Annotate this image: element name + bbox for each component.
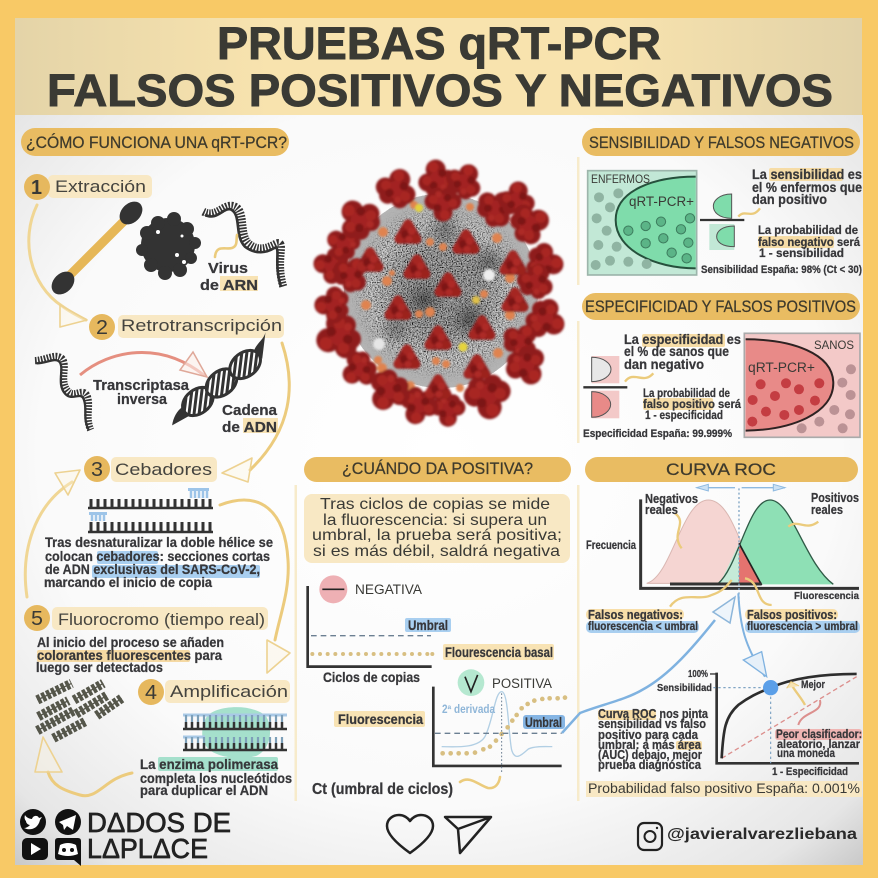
diagram: primers (88, 488, 213, 532)
chart: distributions (641, 484, 859, 607)
callout: virus de ARN: de ARN (200, 277, 258, 294)
heading: sensibilidad: SENSIBILIDAD Y FALSOS NEGATIVOS (589, 134, 854, 152)
icon: virus silhouette (136, 212, 201, 280)
heading: cuando da positiva: ¿CUÁNDO DA POSITIVA? (342, 459, 533, 478)
icon: heart (387, 815, 433, 853)
labels: positiva chart (312, 676, 565, 798)
step 4 heading: 4 (145, 682, 157, 704)
title (47, 18, 833, 116)
labels: negativa chart: Ciclos de copias (323, 669, 420, 685)
labels: distributions: Frecuencia (586, 540, 636, 552)
arrow: step 3 to 4 (220, 500, 290, 673)
step 2 heading (89, 314, 284, 340)
text: sensibilidad definition: 1 - sensibilidad (759, 246, 844, 260)
labels: distributions: Fluorescencia (794, 590, 859, 602)
chart: positiva (433, 669, 567, 774)
step 5 heading: Fluorocromo (tiempo real) (58, 610, 265, 629)
step 1 heading: 1 (31, 177, 42, 199)
text box: explicacion: si es más débil, saldrá negativa (313, 543, 560, 560)
arrow: step 1 to 2 (29, 205, 87, 327)
text box: explicacion: la fluorescencia: si supera un (323, 512, 547, 529)
brand name (87, 807, 231, 864)
text: sensibilidad definition: dan positivo (752, 191, 827, 207)
labels: positiva chart: Fluorescencia (338, 711, 423, 727)
callout: peor clasificador: una moneda (777, 746, 835, 760)
text: polimerasa: para duplicar el ADN (140, 782, 268, 798)
text: colorantes: luego ser detectados (36, 659, 163, 675)
text: especificidad definition: 1 - especificidad (645, 410, 723, 422)
heading: curva ROC: CURVA ROC (666, 461, 776, 479)
label: transcriptasa inversa: Transcriptasa (93, 377, 190, 394)
heading: cuando da positiva (304, 457, 571, 482)
icon: RNA strand 2 (35, 356, 91, 430)
callout: peor clasificador (775, 727, 862, 760)
callout: virus de ARN: Virus (208, 260, 248, 277)
labels: distributions: Positivos (811, 490, 859, 505)
callout: falsos positivos (745, 608, 860, 633)
arrow: step 2 to 3 (222, 343, 289, 482)
step 4 heading (138, 679, 290, 705)
callout: falsos negativos: Falsos negativos: (588, 608, 683, 622)
labels: negativa chart (323, 582, 554, 685)
text: curva ROC explanation: prueba diagnóstica (598, 758, 702, 772)
arrow: step 5 to 3 (25, 470, 80, 597)
brand social icons (20, 809, 81, 866)
label: transcriptasa inversa: inversa (117, 391, 168, 408)
text: cebadores (44, 534, 273, 590)
labels: sanos (748, 338, 854, 375)
brand name: DΔDOS DE (87, 807, 231, 838)
labels: positiva chart: POSITIVA (492, 676, 552, 691)
text: cebadores: colocan cebadores: secciones cortas (45, 548, 270, 564)
step 2 heading: Retrotranscripción (121, 316, 282, 335)
text: curva ROC explanation: Curva ROC nos pinta (598, 707, 709, 721)
heading: especificidad (582, 293, 860, 320)
arrow: umbral to ROC (562, 597, 735, 733)
label: cadena de ADN (222, 402, 278, 436)
text box: explicacion (304, 494, 570, 563)
heading: sensibilidad (582, 128, 860, 156)
step 5 heading (24, 605, 268, 631)
heading: como funciona (21, 128, 289, 156)
step 1 heading (24, 174, 152, 200)
text: especificidad definition: falso positivo será (643, 399, 742, 411)
text: colorantes: colorantes fluorescentes para (37, 647, 222, 663)
icon: paper plane (445, 817, 491, 853)
text: curva ROC explanation: (AUC) debajo, mejor (598, 748, 702, 762)
text box: explicacion: umbral, la prueba será positiva; (312, 527, 562, 544)
text: especificidad definition: el % de sanos que (624, 343, 729, 359)
text: polimerasa: La enzima polimerasa (140, 756, 278, 772)
text: curva ROC explanation: sensibilidad vs falso (598, 717, 706, 731)
label: cadena de ADN: de ADN (222, 419, 277, 436)
text: cebadores: marcando el inicio de copia (44, 574, 212, 590)
icon: amplified DNA copies (37, 683, 122, 738)
callout: peor clasificador: Peor clasificador: (776, 727, 862, 741)
labels: enfermos: ENFERMOS (591, 172, 650, 186)
instagram handle (638, 823, 857, 850)
callout: falsos negativos: fluorescencia < umbral (588, 619, 698, 633)
labels: ROC axes: Sensibilidad (657, 682, 712, 694)
text: sensibilidad definition: La probabilidad de (758, 223, 858, 237)
panel: sanos diagram (744, 333, 860, 437)
heading: curva ROC (585, 457, 858, 482)
fraction: sensibilidad (700, 194, 760, 250)
panel: enfermos diagram (588, 171, 697, 275)
labels: negativa chart: Umbral (408, 617, 448, 633)
callout: virus de ARN (200, 235, 258, 294)
text: sensibilidad definition: falso negativo será (758, 235, 860, 249)
step 3 heading: Cebadores (115, 460, 212, 479)
labels: sanos: qRT-PCR+ (748, 360, 815, 375)
step 3 heading (84, 456, 217, 482)
text: cebadores: de ADN exclusivas del SARS-CoV-2, (45, 561, 260, 577)
title: FALSOS POSITIVOS Y NEGATIVOS (47, 65, 833, 116)
labels: distributions (586, 490, 859, 602)
labels: ROC axes: 100% (688, 669, 708, 680)
text: polimerasa: completa los nucleótidos (140, 770, 292, 786)
text: especificidad definition: La especificidad es (624, 331, 741, 347)
arrow: step 4 to 5 (35, 737, 132, 796)
labels: ROC axes: Mejor (801, 679, 826, 691)
text: especificidad definition: La probabilidad de (643, 388, 730, 400)
labels: ROC axes: 1 - Especificidad (772, 766, 848, 778)
text: especificidad definition: dan negativo (624, 356, 704, 372)
chart: ROC curve (710, 593, 859, 763)
callout: falsos positivos: Falsos positivos: (747, 608, 837, 622)
callout: falsos negativos (586, 608, 699, 633)
text: colorantes (36, 634, 224, 675)
label: transcriptasa inversa (93, 377, 190, 408)
brand name: LΔPLΔCE (87, 833, 208, 864)
icon: swab (47, 197, 147, 299)
labels: enfermos: qRT-PCR+ (629, 194, 694, 209)
text: curva ROC explanation: positivo para cada (598, 728, 699, 742)
stat: probabilidad falso positivo: Probabilidad falso positivo España: 0.001% (588, 781, 860, 796)
text: sensibilidad definition: La sensibilidad es (752, 166, 862, 182)
labels: positiva chart: Umbral (525, 714, 562, 730)
text: especificidad definition (583, 331, 742, 440)
text: polimerasa (140, 756, 292, 798)
text: especificidad definition: Especificidad España: 99.999% (583, 428, 732, 440)
text: curva ROC explanation (598, 707, 709, 772)
text: sensibilidad definition: el % enfermos que (752, 179, 862, 195)
text: curva ROC explanation: umbral: a más área (598, 738, 702, 752)
step 1 heading: Extracción (55, 177, 146, 196)
labels: positiva chart: Ct (umbral de ciclos) (312, 781, 453, 798)
callout: peor clasificador: aleatorio, lanzar (777, 737, 860, 751)
labels: distributions: reales (645, 502, 678, 517)
squiggle: Ct pointer (460, 777, 500, 788)
arrow: transcriptasa (80, 352, 207, 377)
text: sensibilidad definition (701, 166, 862, 276)
text: colorantes: Al inicio del proceso se añaden (37, 634, 224, 650)
step 4 heading: Amplificación (170, 682, 288, 701)
labels: distributions: reales (811, 502, 843, 517)
diagram: polymerase (183, 707, 287, 758)
step 5 heading: 5 (31, 608, 43, 630)
labels: distributions: Negativos (645, 491, 698, 506)
text: cebadores: Tras desnaturalizar la doble hélice se (45, 534, 273, 550)
labels: enfermos (591, 172, 694, 209)
icon: DNA helix (162, 332, 281, 432)
label: cadena de ADN: Cadena (222, 402, 278, 419)
step 3 heading: 3 (91, 459, 103, 481)
virus illustration (309, 156, 573, 430)
text box: explicacion: Tras ciclos de copias se mide (320, 496, 550, 513)
chart: negativa (308, 575, 434, 667)
labels: positiva chart: 2ª derivada (442, 704, 496, 716)
labels: negativa chart: NEGATIVA (355, 582, 422, 597)
heading: como funciona: ¿CÓMO FUNCIONA UNA qRT-PCR? (26, 133, 287, 152)
labels: ROC axes (657, 669, 848, 778)
instagram handle: @javieralvarezliebana (667, 826, 857, 843)
step 2 heading: 2 (96, 317, 108, 339)
fraction: especificidad (583, 356, 653, 418)
title: PRUEBAS qRT-PCR (217, 18, 661, 69)
icon: RNA strand (203, 206, 283, 287)
labels: negativa chart: Flourescencia basal (445, 644, 553, 660)
labels: sanos: SANOS (814, 338, 854, 352)
panel: title band (15, 18, 862, 115)
callout: falsos positivos: fluorescencia > umbral (747, 619, 858, 633)
